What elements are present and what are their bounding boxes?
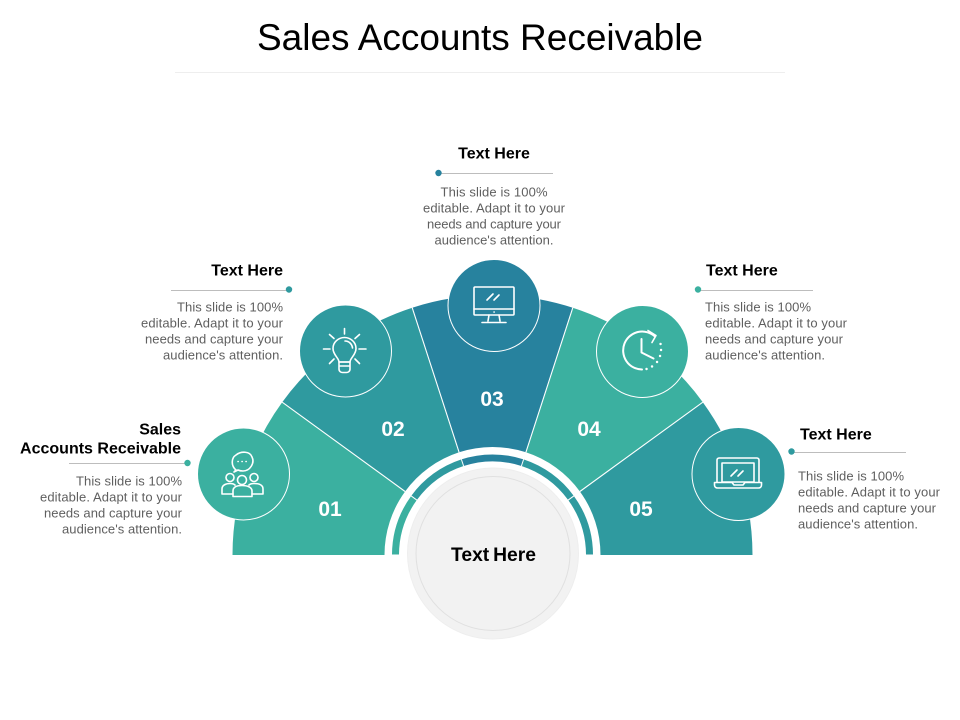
number 04: 04 [577,418,601,441]
center circle: Text Here [451,545,536,566]
callout 04: Text Here [706,262,778,280]
segment 03 [412,295,573,452]
callout 03: editable. Adapt it to your [423,200,566,216]
callout 03: needs and capture your [427,216,562,232]
title: Sales Accounts Receivable [257,17,703,58]
callout 05 [788,426,941,532]
callout 02: Text Here [211,262,283,280]
icon circle 04: clock [596,306,688,398]
number 03: 03 [480,388,504,411]
callout 04: This slide is 100% [705,300,811,314]
callout 01: This slide is 100% [76,474,182,488]
icon circle 02: light bulb [300,305,392,397]
segment 05 [580,402,752,555]
callout 05: Text Here [800,426,872,444]
callout 01: audience's attention. [62,522,182,536]
callout 03 [423,146,566,248]
segment 02 [282,308,459,492]
callout 01 [20,422,191,536]
icon circle 01: people [198,428,290,520]
callout 04: editable. Adapt it to your [705,316,848,330]
callout 02: editable. Adapt it to your [141,316,284,330]
number 01: 01 [318,498,342,521]
callout 02: This slide is 100% [177,300,283,314]
callout 01: needs and capture your [44,506,183,520]
semicircle diagram [232,295,752,555]
callout 04: needs and capture your [705,332,844,346]
number 02: 02 [381,418,405,441]
callout 02: needs and capture your [145,332,284,346]
center circle [408,468,578,639]
callout 05: audience's attention. [798,516,918,532]
icon circle 03: monitor [448,260,540,352]
callout 02 [141,262,292,362]
callout 01: Sales [139,422,181,438]
callout 01: Accounts Receivable [20,440,181,458]
thin inner arc [396,458,590,554]
callout 02: audience's attention. [163,348,283,362]
callout 03: This slide is 100% [440,184,548,200]
callout 05: needs and capture your [798,500,937,516]
callout 03: audience's attention. [434,232,554,248]
segment 01 [232,402,405,555]
callout 05: editable. Adapt it to your [798,484,941,500]
callout 04 [695,262,848,362]
number 05: 05 [629,498,653,521]
callout 05: This slide is 100% [798,468,904,484]
segment 04 [526,308,703,492]
callout 03: Text Here [458,146,530,162]
icon circle 05: laptop [692,428,785,520]
callout 04: audience's attention. [705,348,825,362]
callout 01: editable. Adapt it to your [40,490,183,504]
